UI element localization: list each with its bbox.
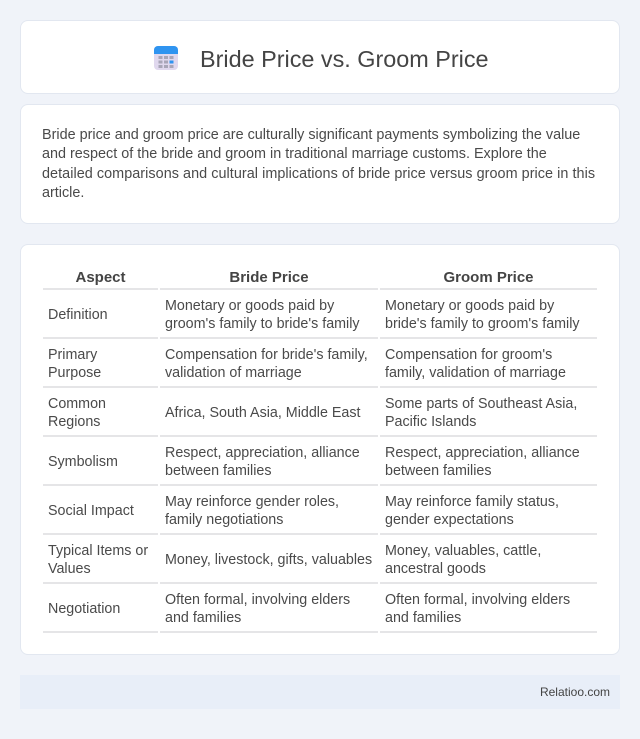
comparison table: between families bbox=[165, 463, 272, 479]
comparison table: May reinforce family status, bbox=[385, 494, 559, 510]
footer bar bbox=[20, 675, 620, 709]
comparison table: Pacific Islands bbox=[385, 414, 476, 430]
comparison table: Africa, South Asia, Middle East bbox=[165, 405, 360, 421]
icon: calendar bbox=[154, 46, 178, 70]
comparison table: gender expectations bbox=[385, 512, 514, 528]
title: Bride Price vs. Groom Price bbox=[200, 46, 489, 72]
comparison table: Aspect bbox=[75, 269, 126, 286]
comparison table: family, validation of marriage bbox=[385, 365, 566, 381]
comparison table: Groom Price bbox=[443, 269, 534, 286]
comparison table: Common bbox=[48, 396, 106, 412]
comparison table: Social Impact bbox=[48, 503, 134, 519]
comparison table: Primary bbox=[48, 347, 97, 363]
comparison table: Regions bbox=[48, 414, 100, 430]
footer credit: Relatioo.com bbox=[540, 685, 610, 699]
comparison table: Monetary or goods paid by bbox=[385, 298, 554, 314]
comparison table: Money, livestock, gifts, valuables bbox=[165, 552, 372, 568]
comparison table: bride's family to groom's family bbox=[385, 316, 580, 332]
intro text: and respect of the bride and groom in traditional marriage customs. Explore the bbox=[42, 146, 547, 162]
comparison table: Often formal, involving elders bbox=[385, 592, 570, 608]
intro text: detailed comparisons and cultural implications of bride price versus groom price in this bbox=[42, 166, 595, 182]
comparison table: Typical Items or bbox=[48, 543, 148, 559]
comparison table: Money, valuables, cattle, bbox=[385, 543, 541, 559]
comparison table: Symbolism bbox=[48, 454, 118, 470]
comparison table: Some parts of Southeast Asia, bbox=[385, 396, 577, 412]
comparison table: Monetary or goods paid by bbox=[165, 298, 334, 314]
comparison table: validation of marriage bbox=[165, 365, 302, 381]
comparison table: Respect, appreciation, alliance bbox=[385, 445, 580, 461]
comparison table: Definition bbox=[48, 307, 108, 323]
comparison table: Purpose bbox=[48, 365, 101, 381]
comparison table: Bride Price bbox=[229, 269, 309, 286]
header panel bbox=[20, 20, 620, 94]
comparison table: and families bbox=[165, 610, 241, 626]
comparison table: ancestral goods bbox=[385, 561, 486, 577]
intro text: Bride price and groom price are culturally significant payments symbolizing the value bbox=[42, 127, 580, 143]
comparison table: Often formal, involving elders bbox=[165, 592, 350, 608]
comparison table: between families bbox=[385, 463, 492, 479]
intro text bbox=[42, 127, 595, 201]
comparison table: Compensation for bride's family, bbox=[165, 347, 368, 363]
comparison table: and families bbox=[385, 610, 461, 626]
comparison table: Compensation for groom's bbox=[385, 347, 552, 363]
comparison table panel bbox=[20, 244, 620, 655]
comparison table: Values bbox=[48, 561, 91, 577]
intro panel bbox=[20, 104, 620, 224]
comparison table: Negotiation bbox=[48, 601, 120, 617]
intro text: article. bbox=[42, 185, 84, 201]
comparison table: Respect, appreciation, alliance bbox=[165, 445, 360, 461]
comparison table: family negotiations bbox=[165, 512, 283, 528]
comparison table: groom's family to bride's family bbox=[165, 316, 360, 332]
comparison table: May reinforce gender roles, bbox=[165, 494, 339, 510]
